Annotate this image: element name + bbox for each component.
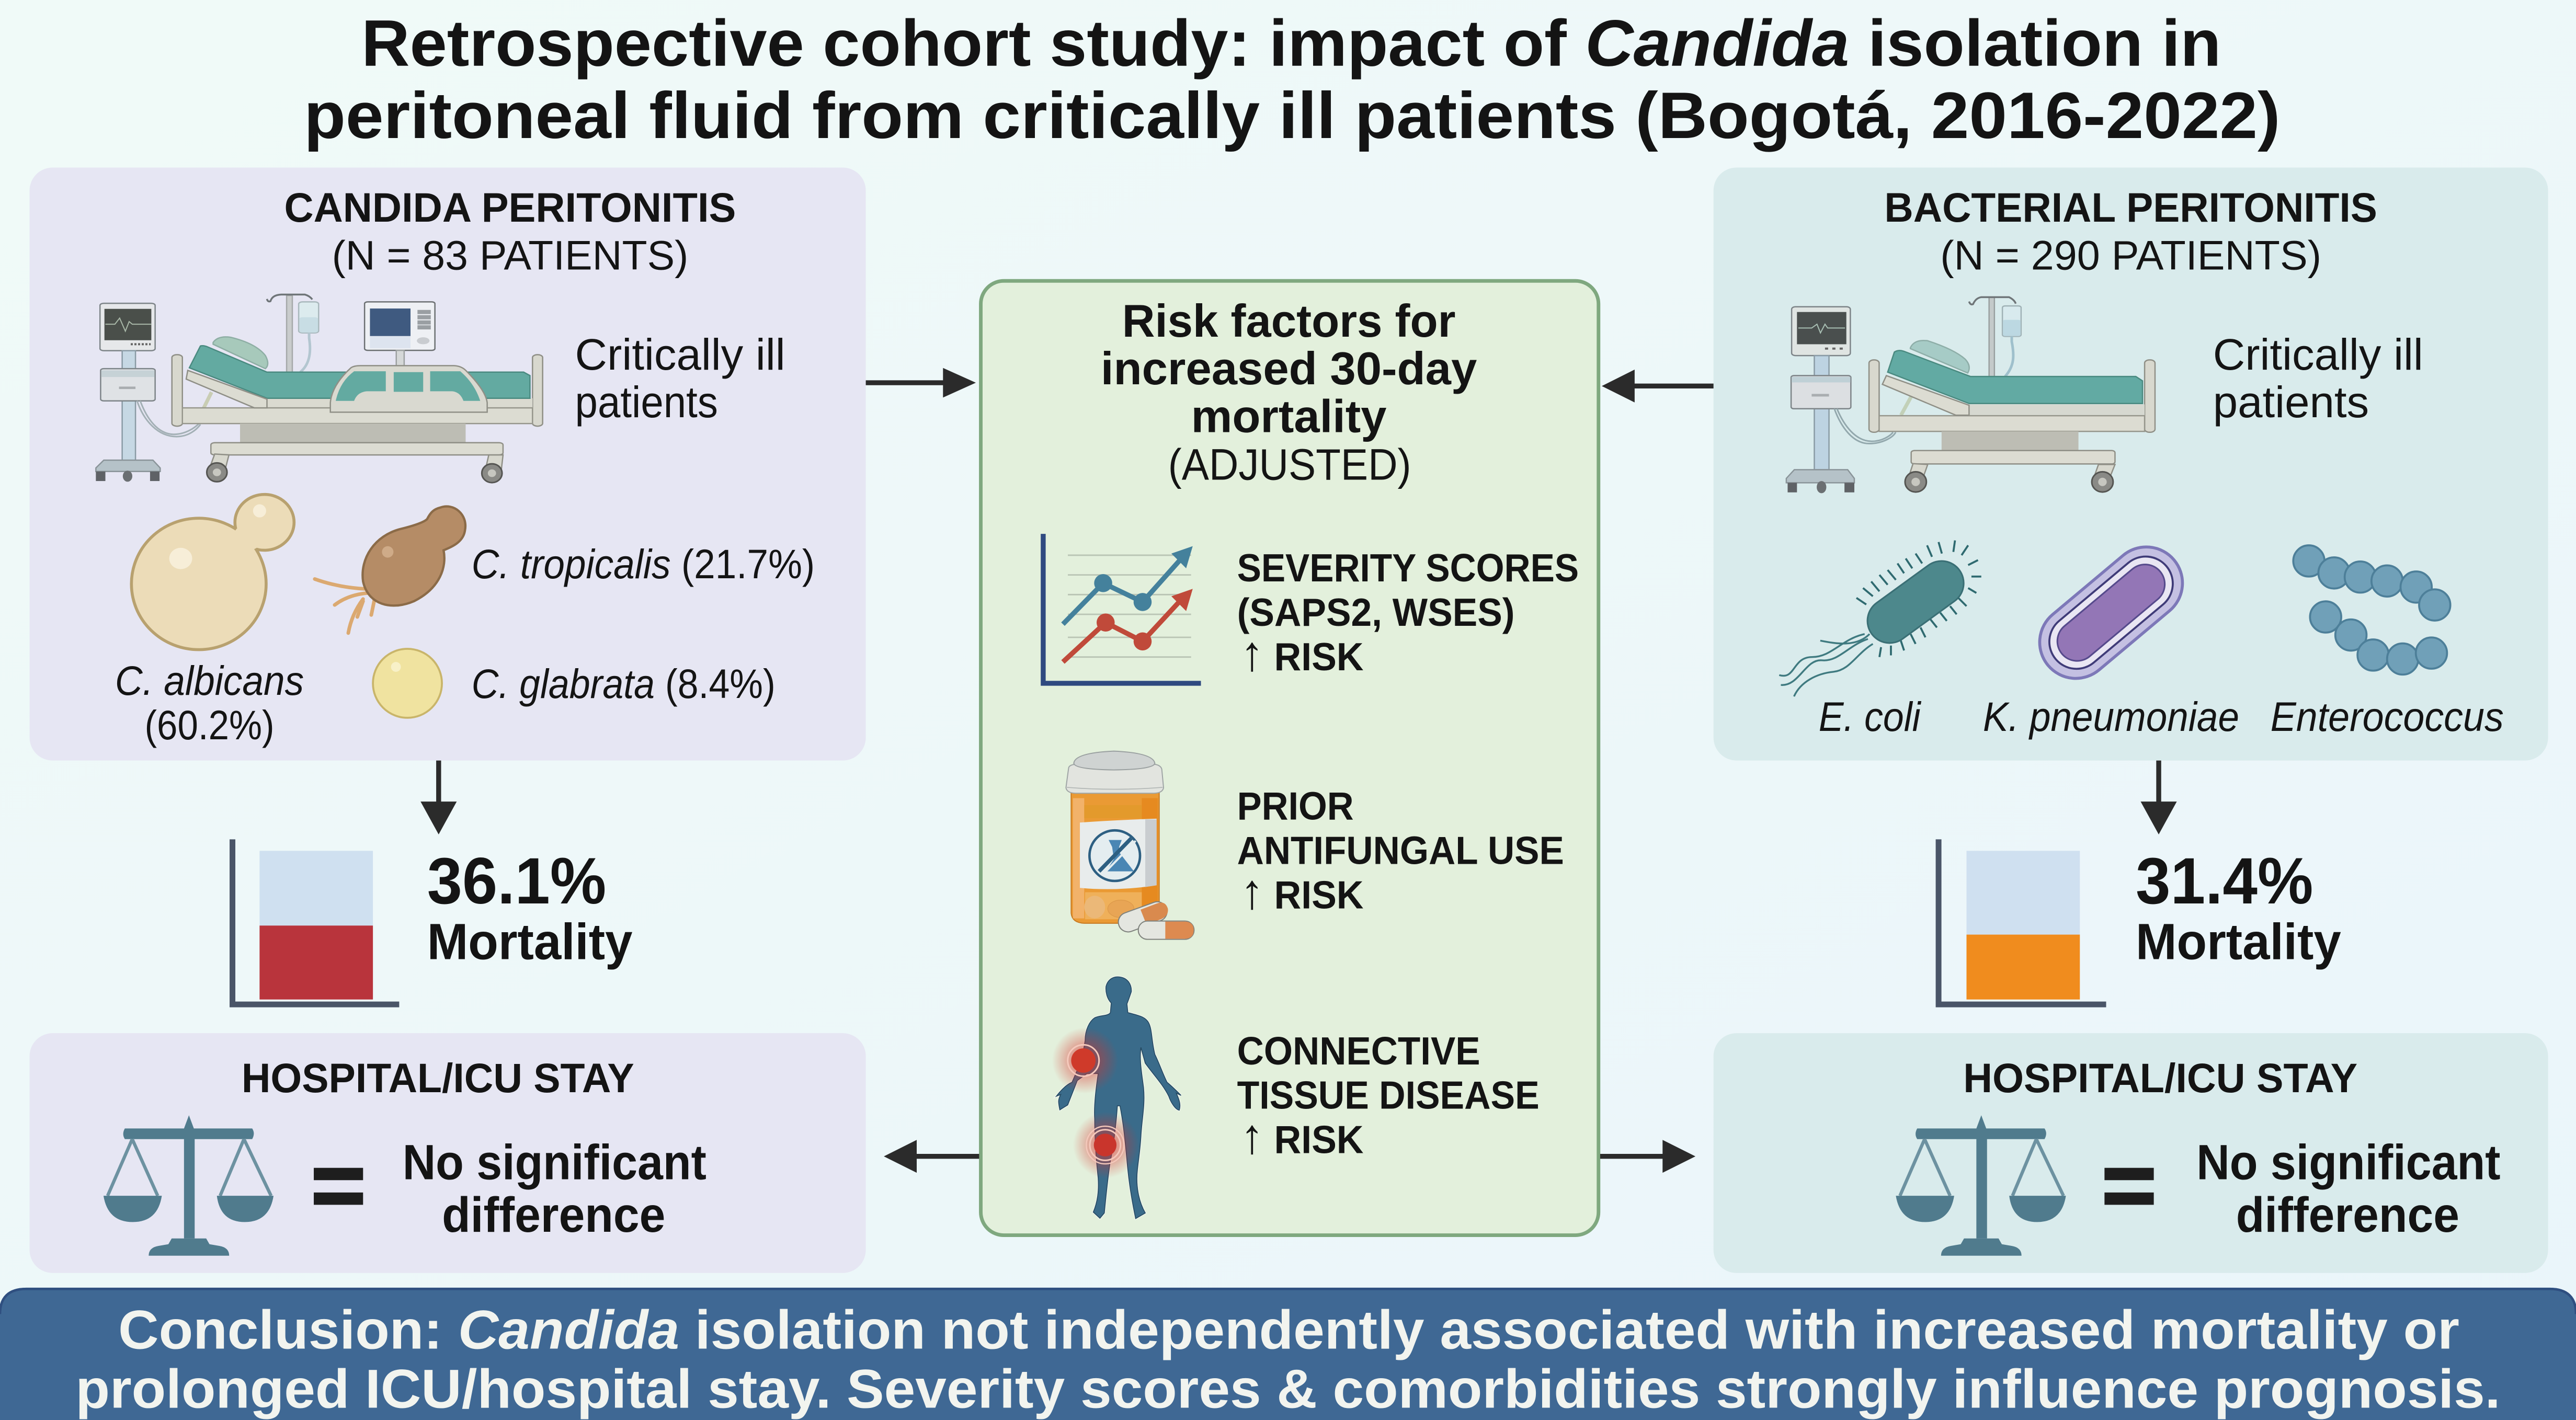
- heading: risk factors: mortality: [1191, 390, 1387, 442]
- stat: candida mortality: Mortality: [427, 913, 633, 970]
- heading: bacterial peritonitis: [1884, 185, 2377, 278]
- heading: candida peritonitis: (N = 83 PATIENTS): [332, 232, 688, 278]
- label: critically ill patients: [2213, 329, 2423, 427]
- text: severity scores: [1237, 546, 1579, 681]
- icon: C. albicans yeast cell: [131, 495, 294, 650]
- heading: risk factors: Risk factors for: [1122, 295, 1455, 347]
- text: no significant difference: difference: [2236, 1187, 2459, 1242]
- label: critically ill patients: [575, 329, 785, 427]
- label: Enterococcus: Enterococcus: [2271, 694, 2504, 740]
- text: prior antifungal use: PRIOR: [1237, 784, 1354, 828]
- icon: equals sign: [2104, 1168, 2154, 1205]
- conclusion banner: [0, 1288, 2576, 1420]
- label: critically ill patients: Critically ill: [575, 329, 785, 379]
- text: no significant difference: No significant: [2196, 1135, 2500, 1190]
- text: connective tissue disease: CONNECTIVE: [1237, 1029, 1480, 1073]
- heading: hospital stay: HOSPITAL/ICU STAY: [1963, 1055, 2357, 1101]
- text: severity scores: (SAPS2, WSES): [1237, 590, 1515, 634]
- panel: candida hospital stay: [30, 1033, 866, 1273]
- icon: ICU bed with monitors: [96, 294, 543, 483]
- stat: bacterial mortality: 31.4%: [2136, 844, 2313, 918]
- panel: risk factors: [981, 281, 1599, 1235]
- text: severity scores: ↑ RISK: [1240, 626, 1364, 681]
- panel: bacterial hospital stay: [1714, 1033, 2548, 1273]
- label: critically ill patients: patients: [575, 377, 718, 427]
- text: no significant difference: [2196, 1135, 2500, 1242]
- icon: severity chart: [1043, 534, 1201, 683]
- text: prior antifungal use: ANTIFUNGAL USE: [1237, 829, 1564, 873]
- label: K. pneumoniae: K. pneumoniae: [1983, 694, 2239, 740]
- panel: bacterial peritonitis: [1714, 167, 2548, 761]
- text: severity scores: SEVERITY SCORES: [1237, 546, 1579, 590]
- label: critically ill patients: Critically ill: [2213, 329, 2423, 379]
- arrow: risk factors to candida stay: [884, 1140, 979, 1173]
- arrow: candida panel to mortality: [420, 761, 457, 834]
- heading: risk factors: increased 30-day: [1101, 342, 1477, 394]
- text: prior antifungal use: ↑ RISK: [1240, 864, 1364, 919]
- bar chart: bacterial mortality: [1939, 839, 2106, 1004]
- heading: bacterial peritonitis: BACTERIAL PERITONITIS: [1884, 185, 2377, 231]
- arrow: risk factors to bacterial stay: [1600, 1140, 1695, 1173]
- text: no significant difference: [403, 1135, 706, 1242]
- heading: risk factors: (ADJUSTED): [1168, 439, 1411, 489]
- label: C. tropicalis: C. tropicalis (21.7%): [472, 541, 815, 587]
- icon: E. coli bacterium: [1779, 541, 1981, 696]
- icon: balance scales: [1896, 1115, 2066, 1256]
- heading: candida peritonitis: CANDIDA PERITONITIS: [284, 185, 736, 231]
- icon: body with inflamed joints: [1052, 977, 1181, 1219]
- arrow: bacterial panel to mortality: [2140, 761, 2177, 834]
- text: connective tissue disease: TISSUE DISEASE: [1237, 1073, 1540, 1117]
- arrow: candida panel to risk factors: [866, 368, 976, 397]
- heading: hospital stay: HOSPITAL/ICU STAY: [242, 1055, 634, 1101]
- label: C. albicans: (60.2%): [144, 702, 275, 748]
- heading: risk factors: [1101, 295, 1477, 489]
- text: connective tissue disease: [1237, 1029, 1540, 1163]
- stat: candida mortality: [427, 844, 633, 970]
- icon: Enterococcus chain: [2293, 545, 2450, 674]
- label: critically ill patients: patients: [2213, 377, 2369, 427]
- text: no significant difference: difference: [442, 1187, 665, 1242]
- text: prior antifungal use: [1237, 784, 1564, 919]
- bar chart: candida mortality: [233, 839, 399, 1004]
- arrow: bacterial panel to risk factors: [1602, 370, 1714, 403]
- stat: candida mortality: 36.1%: [427, 844, 606, 918]
- icon: ICU bed with monitor: [1786, 297, 2155, 493]
- icon: balance scales: [104, 1115, 273, 1256]
- icon: K. pneumoniae bacterium: [2025, 532, 2197, 693]
- label: C. albicans: [115, 658, 304, 748]
- icon: C. glabrata yeast cell: [373, 649, 442, 718]
- label: C. glabrata: C. glabrata (8.4%): [472, 661, 776, 707]
- text: no significant difference: No significant: [403, 1135, 706, 1190]
- title: peritoneal fluid from critically ill patients (Bogotá, 2016-2022): [304, 78, 2281, 152]
- icon: equals sign: [314, 1168, 363, 1205]
- panel: candida peritonitis: [30, 167, 866, 761]
- conclusion banner: Conclusion: Candida isolation not independently associated with increased mortality or: [118, 1299, 2459, 1360]
- stat: bacterial mortality: Mortality: [2136, 913, 2341, 970]
- title: [304, 6, 2281, 152]
- heading: bacterial peritonitis: (N = 290 PATIENTS): [1940, 232, 2321, 278]
- conclusion banner: prolonged ICU/hospital stay. Severity scores & comorbidities strongly influence prognosis.: [76, 1358, 2500, 1419]
- icon: antifungal pill bottle: [1066, 751, 1194, 940]
- heading: candida peritonitis: [284, 185, 736, 278]
- stat: bacterial mortality: [2136, 844, 2341, 970]
- label: C. albicans: C. albicans: [115, 658, 304, 704]
- icon: C. tropicalis yeast cell: [315, 507, 465, 633]
- text: connective tissue disease: ↑ RISK: [1240, 1108, 1364, 1163]
- label: E. coli: E. coli: [1819, 694, 1922, 740]
- title: Retrospective cohort study: impact of Candida isolation in: [361, 6, 2221, 80]
